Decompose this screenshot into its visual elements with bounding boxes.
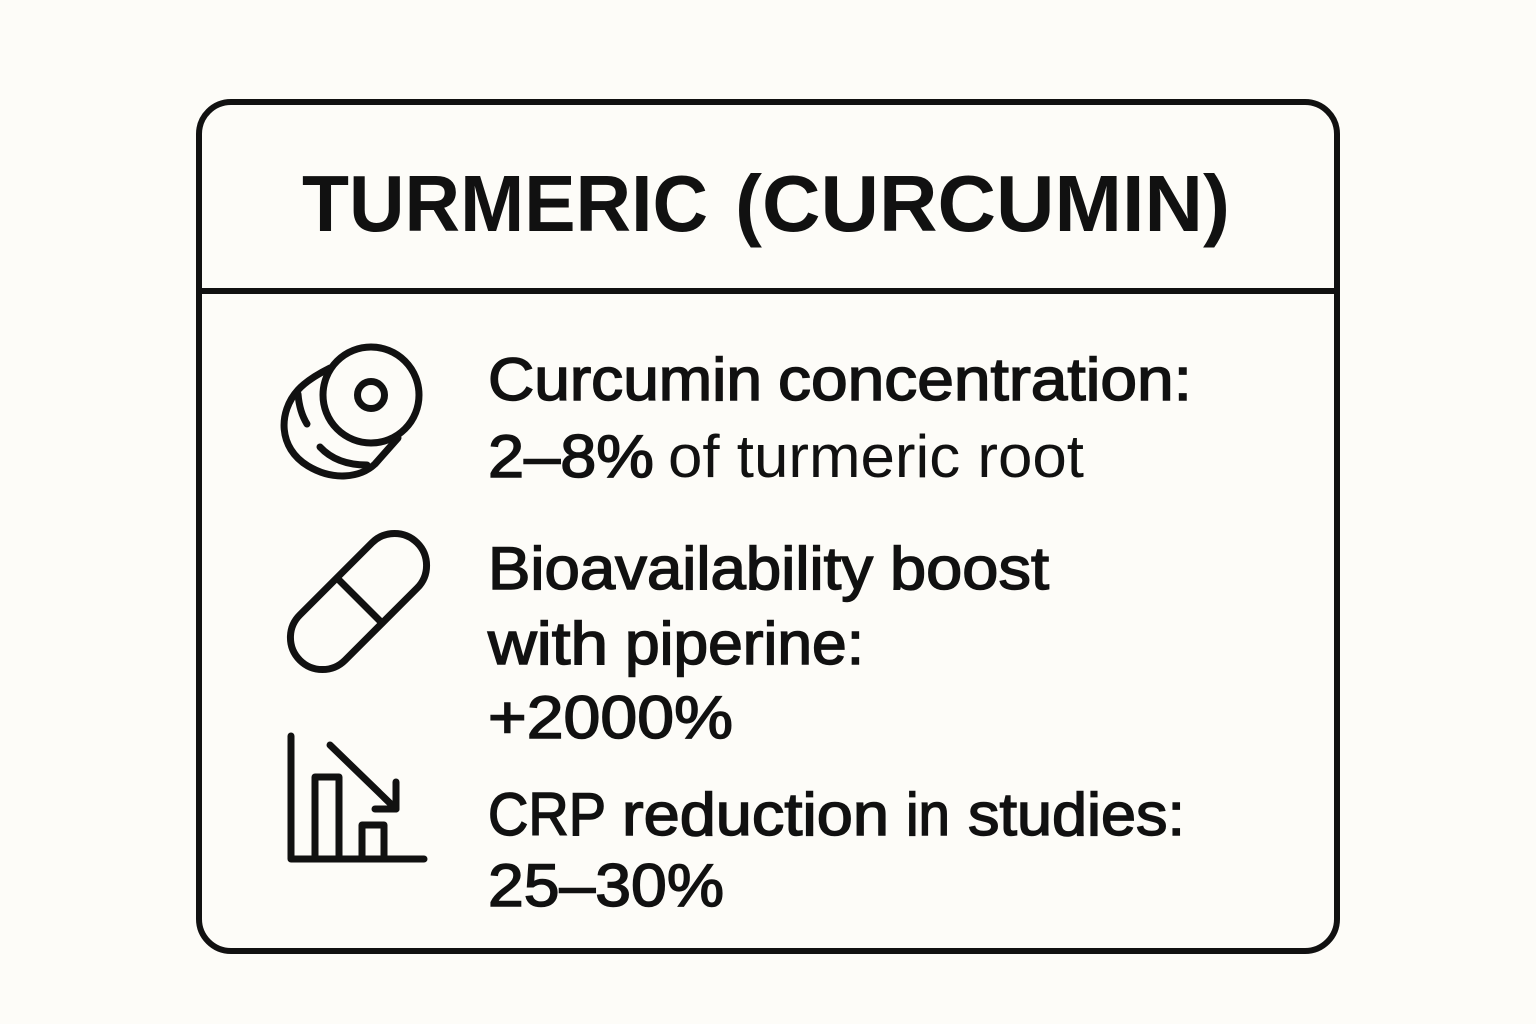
text: curcumin concentration: of turmeric root	[668, 423, 1084, 490]
text: curcumin concentration: concentration:	[778, 346, 1192, 413]
text: curcumin concentration: Curcumin	[488, 346, 762, 413]
text: bioavailability boost: boost	[890, 535, 1049, 602]
text: CRP reduction: in	[906, 781, 950, 848]
title	[302, 159, 1230, 248]
text: CRP reduction: CRP	[488, 781, 606, 848]
title: TURMERIC	[302, 159, 708, 248]
text: CRP reduction: reduction	[622, 781, 889, 848]
text: curcumin concentration: 2–8%	[488, 423, 654, 490]
text: CRP reduction	[488, 781, 1185, 919]
icon: turmeric root slices	[284, 347, 419, 476]
text: curcumin concentration	[488, 346, 1192, 490]
title: (CURCUMIN)	[735, 159, 1230, 248]
text: bioavailability boost: with	[487, 610, 608, 677]
text: bioavailability boost	[487, 535, 1049, 751]
text: bioavailability boost: +2000%	[488, 684, 733, 751]
card panel	[199, 102, 1337, 951]
text: bioavailability boost: Bioavailability	[488, 535, 873, 602]
text: bioavailability boost: piperine:	[625, 610, 864, 677]
icon: declining bar chart	[291, 736, 424, 859]
text: CRP reduction: studies:	[968, 781, 1185, 848]
text: CRP reduction: 25–30%	[488, 852, 724, 919]
icon: capsule	[277, 520, 440, 683]
